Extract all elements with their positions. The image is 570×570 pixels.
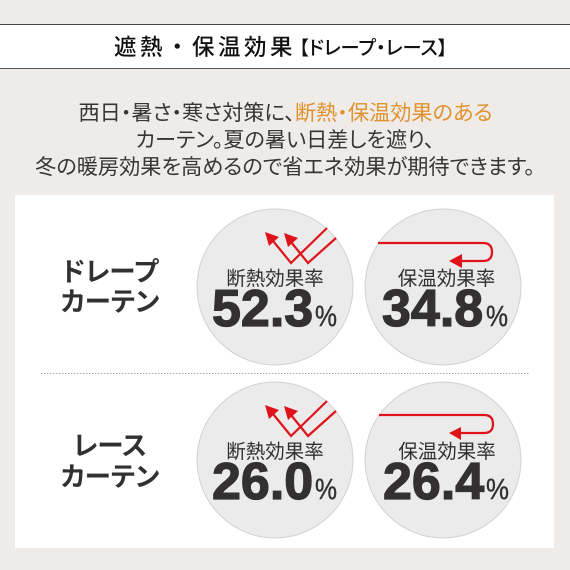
label: drape curtain: カーテン [61, 287, 159, 317]
intro text: 西日・暑さ・寒さ対策に、断熱・保温効果のある [78, 101, 493, 125]
title text: 遮熱・保温効果 [114, 35, 296, 60]
label: drape curtain: ドレープ [62, 257, 159, 287]
stat: lace heat shielding [197, 382, 353, 538]
intro text: カーテン。夏の暑い日差しを遮り、 [135, 128, 435, 152]
intro text [35, 101, 535, 179]
stat: drape heat shielding: 断熱効果率 [226, 268, 324, 290]
stat: drape heat retention [365, 209, 521, 365]
title text: 【ドレープ・レース】 [299, 38, 447, 60]
stat: drape heat retention: % [486, 301, 508, 333]
stat: lace heat retention: % [486, 474, 509, 506]
label: drape curtain [61, 257, 159, 317]
stat: lace heat shielding: % [315, 474, 337, 506]
stat: lace heat retention [365, 382, 521, 538]
stat: drape heat shielding [197, 209, 353, 365]
white panel [15, 195, 554, 548]
stat: drape heat shielding: 52.3 [212, 280, 313, 338]
stat: lace heat shielding: 26.0 [212, 453, 313, 511]
stat: drape heat shielding: % [315, 301, 337, 333]
label: lace curtain: レース [73, 431, 147, 461]
stat: drape heat retention: 34.8 [382, 280, 483, 338]
stat: lace heat retention: 保温効果率 [398, 441, 496, 463]
title band [0, 24, 570, 69]
label: lace curtain: カーテン [61, 462, 159, 492]
stat: drape heat retention: 保温効果率 [398, 268, 495, 290]
intro text: 冬の暖房効果を高めるので省エネ効果が期待できます。 [35, 155, 535, 179]
label: lace curtain [61, 431, 159, 492]
stat: lace heat retention: 26.4 [383, 453, 484, 511]
stat: lace heat shielding: 断熱効果率 [226, 441, 324, 463]
